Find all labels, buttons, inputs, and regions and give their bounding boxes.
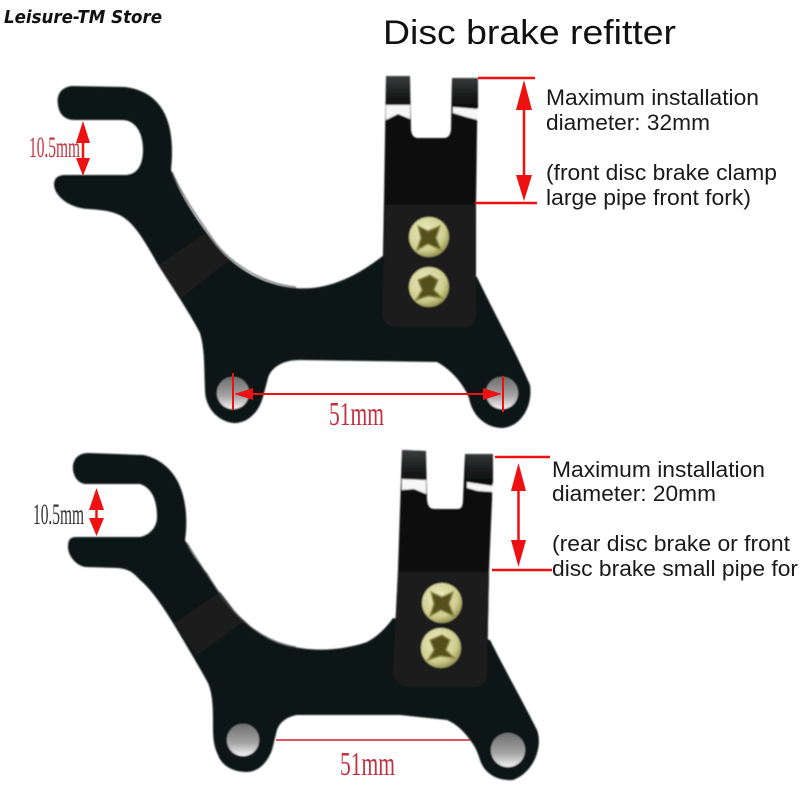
top spec text xyxy=(546,85,777,210)
bottom spec text: (rear disc brake or front xyxy=(552,531,790,556)
top label: 10.5mm: 10.5mm xyxy=(29,131,80,164)
upright highlights xyxy=(386,105,478,120)
mounting holes xyxy=(227,724,259,756)
bracket body xyxy=(68,453,539,780)
clamp plate xyxy=(393,572,489,687)
bottom label: 10.5mm: 10.5mm xyxy=(33,498,84,531)
mounting holes xyxy=(217,377,249,409)
upright tops xyxy=(386,76,478,108)
screws xyxy=(421,583,462,668)
top spec text: (front disc brake clamp xyxy=(546,160,777,185)
band across arm xyxy=(159,234,229,298)
bottom bracket: 20mm adapter xyxy=(68,450,539,780)
top dimension: 32mm xyxy=(475,78,537,203)
bottom spec text xyxy=(552,457,798,581)
top label: 51mm: 51mm xyxy=(329,396,384,433)
bright rim on arm xyxy=(187,543,296,647)
bottom dimension: 51mm line xyxy=(276,739,470,741)
bottom spec text: Maximum installation xyxy=(552,457,765,482)
upright tops xyxy=(402,450,493,483)
top dimension: 51mm line xyxy=(233,373,503,412)
top bracket: 32mm adapter xyxy=(54,76,530,428)
screws xyxy=(409,217,449,307)
bottom label: 51mm: 51mm xyxy=(340,746,395,783)
bottom dimension: 10.5mm arrow xyxy=(89,488,104,536)
clamp plate xyxy=(382,205,476,327)
top dimension: 10.5mm arrow xyxy=(76,121,90,176)
bracket body xyxy=(54,86,530,428)
bottom dimension: 20mm xyxy=(492,457,552,570)
clamp upright xyxy=(393,450,493,687)
band across arm xyxy=(174,592,243,655)
bright rim on arm xyxy=(172,172,296,287)
clamp upright xyxy=(382,76,478,327)
top spec text: Maximum installation xyxy=(546,85,759,110)
bottom spec text: diameter: 20mm xyxy=(552,481,716,506)
bottom spec text: disc brake small pipe for xyxy=(552,556,798,581)
upright highlights xyxy=(402,479,493,494)
top spec text: diameter: 32mm xyxy=(546,110,710,135)
title: Disc brake refitter xyxy=(383,14,676,52)
top spec text: large pipe front fork) xyxy=(546,185,751,210)
store watermark: Leisure-TM Store xyxy=(4,7,162,28)
